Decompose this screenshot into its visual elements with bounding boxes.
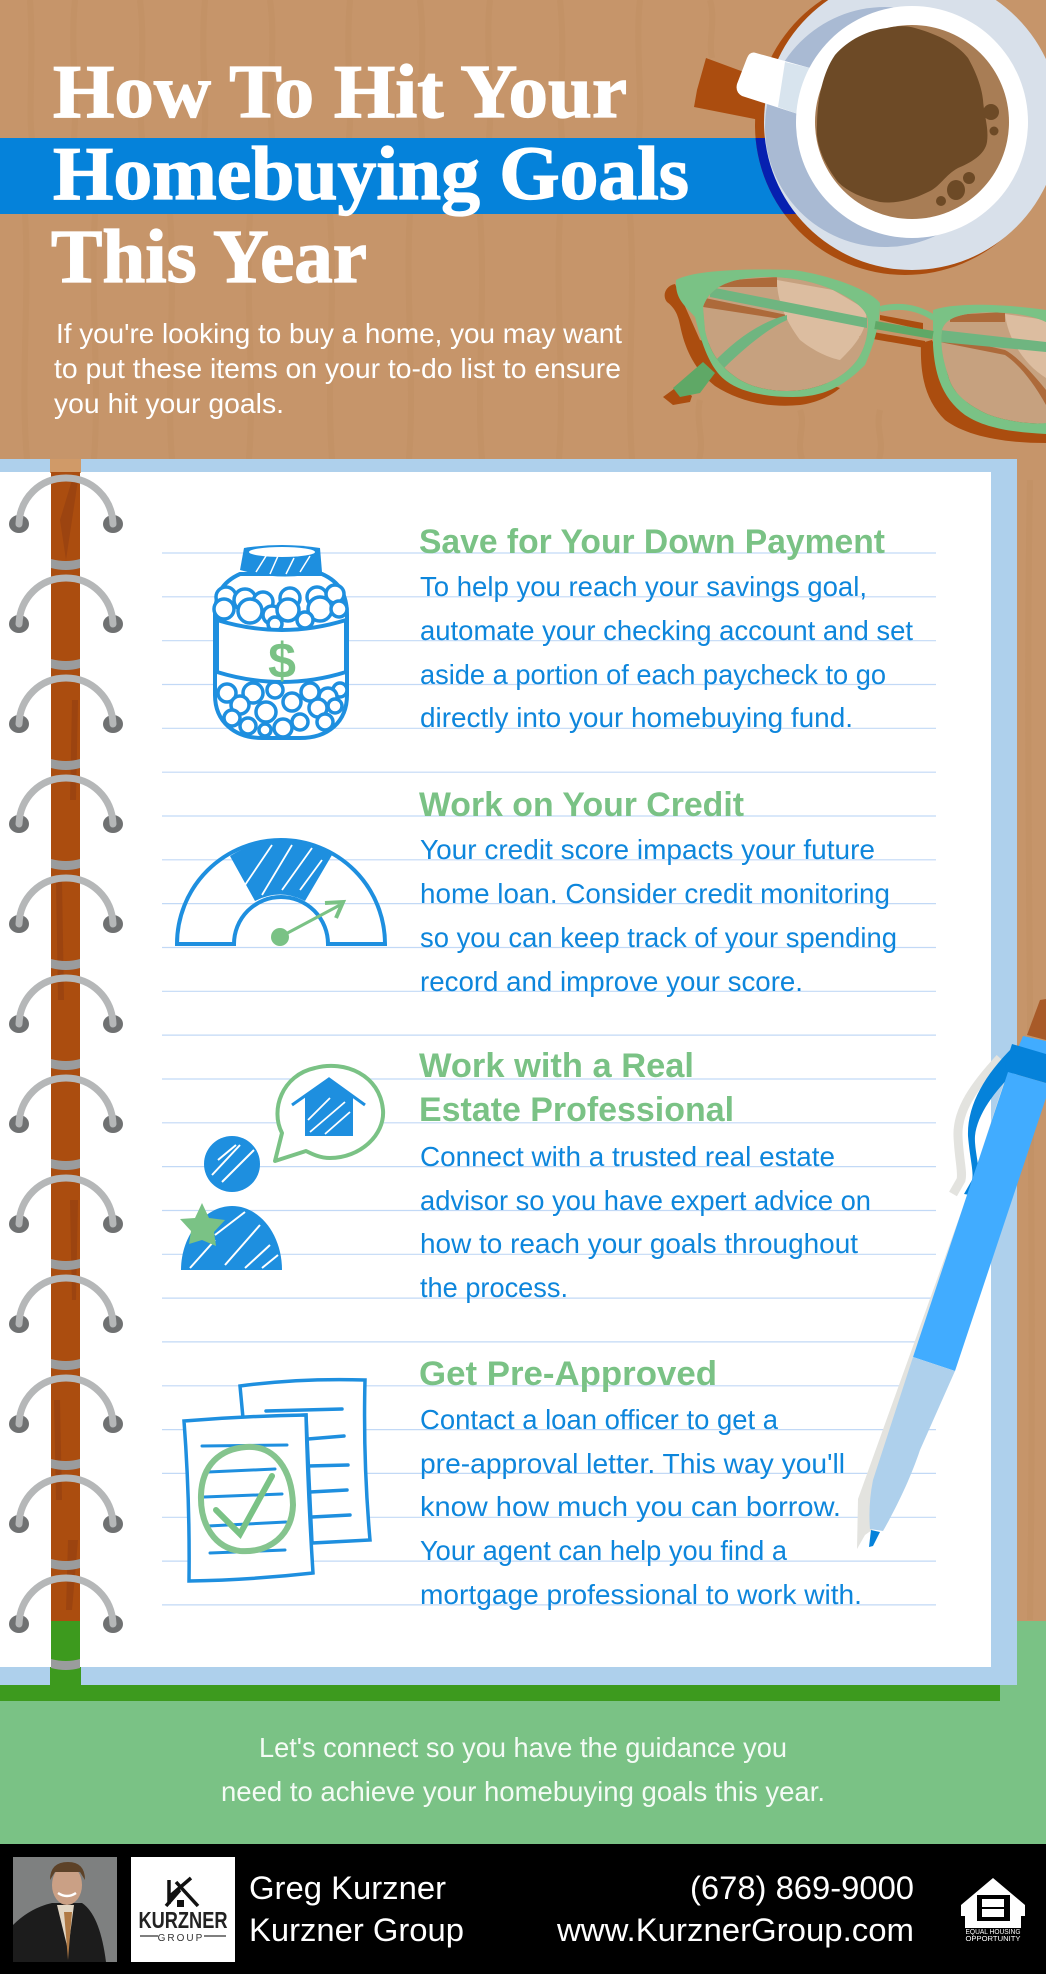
heading: work with a real estate professional <box>419 1047 734 1129</box>
text block: get pre-approved: Contact a loan officer to get a <box>420 1404 778 1435</box>
pen body shadow <box>857 1072 1008 1549</box>
contact details: (678) 869-9000 <box>690 1870 914 1906</box>
icon: coffee cup on saucer <box>694 0 1046 275</box>
text block: get pre-approved: Your agent can help you find a <box>420 1535 787 1566</box>
text block: work with a real estate professional: advisor so you have expert advice on <box>420 1185 871 1216</box>
heading: work with a real estate professional: Estate Professional <box>419 1091 734 1129</box>
icon: green glasses <box>663 269 1046 443</box>
text block: work on your credit: Your credit score impacts your future <box>420 834 875 865</box>
text block: save for your down payment: aside a portion of each paycheck to go <box>420 659 886 690</box>
lid <box>240 545 322 577</box>
text block: work on your credit: home loan. Consider credit monitoring <box>420 878 890 909</box>
title: Homebuying Goals <box>53 132 689 216</box>
closing call to action: Let's connect so you have the guidance you <box>259 1732 787 1763</box>
agent name <box>249 1870 464 1948</box>
text block: save for your down payment: To help you reach your savings goal, <box>420 571 867 602</box>
coins <box>214 585 347 737</box>
title band <box>0 138 860 214</box>
text block: save for your down payment: automate your checking account and set <box>420 615 913 646</box>
clip shadow <box>953 1058 1000 1194</box>
icon: equal housing opportunity: OPPORTUNITY <box>966 1936 1021 1943</box>
closing call to action: need to achieve your homebuying goals this year. <box>221 1776 825 1807</box>
company logo: GROUP <box>158 1933 204 1944</box>
right lens <box>942 312 1046 424</box>
text block: get pre-approved: pre-approval letter. This way you'll <box>420 1448 845 1479</box>
agent photo <box>13 1857 117 1962</box>
text block: work with a real estate professional: Connect with a trusted real estate <box>420 1141 835 1172</box>
heading: get pre-approved: Get Pre-Approved <box>419 1355 717 1393</box>
intro text <box>54 318 622 419</box>
intro text: you hit your goals. <box>54 388 284 419</box>
footer bar <box>0 1844 1046 1974</box>
temple tip <box>673 362 715 397</box>
icon: equal housing opportunity: EQUAL HOUSING <box>966 1929 1020 1936</box>
notebook spine <box>50 459 81 1687</box>
title: This Year <box>51 215 367 299</box>
icon: agent with speech bubble <box>180 1066 383 1270</box>
left lens <box>703 277 868 391</box>
contact details <box>556 1870 914 1948</box>
bridge <box>880 307 934 318</box>
icon: equal housing opportunity <box>961 1878 1025 1943</box>
heading: save for your down payment: Save for Your Down Payment <box>419 523 885 561</box>
text block: save for your down payment <box>420 571 913 733</box>
text block: work with a real estate professional: the process. <box>420 1272 568 1303</box>
frame shadow <box>665 284 840 406</box>
dollar sign: $ <box>268 633 296 689</box>
intro text: to put these items on your to-do list to ensure <box>54 353 621 384</box>
company logo: KURZNER <box>138 1907 228 1933</box>
text block: work on your credit: record and improve your score. <box>420 966 803 997</box>
text block: get pre-approved: mortgage professional to work with. <box>420 1579 862 1610</box>
closing call to action <box>221 1732 825 1807</box>
green footer background <box>0 1621 1046 1844</box>
panel: notebook page <box>0 459 1017 1701</box>
cup handle <box>737 53 810 114</box>
text block: work on your credit <box>420 834 897 997</box>
text block: work with a real estate professional <box>420 1141 871 1303</box>
text block: work on your credit: so you can keep track of your spending <box>420 922 897 953</box>
heading: work on your credit: Work on Your Credit <box>419 786 744 824</box>
ruled lines <box>162 553 936 1605</box>
icon: blue pen <box>857 999 1046 1549</box>
heading: work with a real estate professional: Work with a Real <box>419 1047 694 1085</box>
spiral binding rings <box>9 478 123 1670</box>
icon: savings jar <box>214 545 347 738</box>
handle shadow <box>694 58 775 125</box>
company logo <box>131 1857 235 1962</box>
text block: get pre-approved <box>420 1404 862 1610</box>
label <box>217 620 346 682</box>
rims <box>676 269 880 397</box>
agent name: Kurzner Group <box>249 1912 464 1948</box>
contact details: www.KurznerGroup.com <box>556 1912 914 1948</box>
icon: pre-approval documents <box>184 1380 370 1581</box>
text block: get pre-approved: know how much you can borrow. <box>420 1491 841 1522</box>
clip <box>964 1048 1015 1195</box>
text block: save for your down payment: directly into your homebuying fund. <box>420 702 853 733</box>
intro text: If you're looking to buy a home, you may want <box>56 318 622 349</box>
text block: work with a real estate professional: how to reach your goals throughout <box>420 1228 858 1259</box>
title <box>51 50 689 299</box>
icon: credit score gauge <box>177 840 385 946</box>
title: How To Hit Your <box>53 50 627 134</box>
agent name: Greg Kurzner <box>249 1870 446 1906</box>
